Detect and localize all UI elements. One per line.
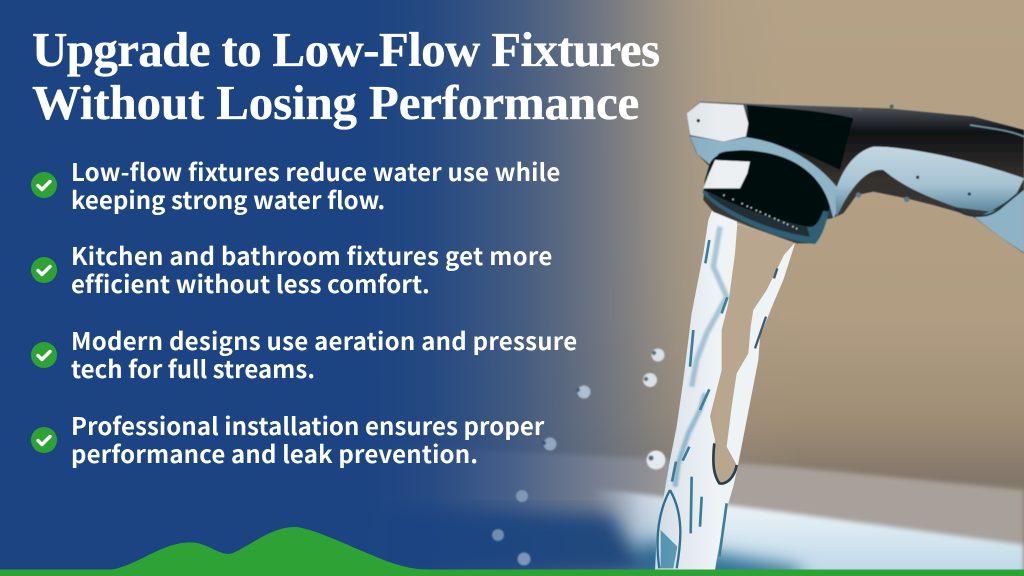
item 4 (31, 407, 544, 470)
text 1: Low-flow fixtures reduce water use while (71, 153, 560, 188)
text 1 (71, 153, 560, 216)
text 3: tech for full streams. (71, 350, 315, 385)
text 4 (71, 407, 544, 470)
stream body (655, 198, 795, 570)
item 2 (31, 237, 553, 300)
text 3 (71, 322, 577, 385)
icon: check 3 (31, 342, 57, 368)
icon: check 2 (31, 257, 57, 283)
item 1 (31, 153, 560, 216)
icon: check 4 (31, 427, 57, 453)
text 4: performance and leak prevention. (71, 435, 478, 470)
text 2 (71, 237, 553, 300)
green footer hills (0, 527, 1024, 576)
icon: check 1 (31, 172, 57, 198)
text 3: Modern designs use aeration and pressure (71, 322, 577, 357)
soft water texture (675, 227, 727, 487)
checklist (31, 153, 577, 470)
water stream (655, 198, 795, 570)
water droplets (492, 348, 666, 566)
text 2: efficient without less comfort. (71, 265, 430, 300)
faucet (687, 102, 1024, 253)
title: Upgrade to Low-Flow Fixtures (32, 22, 659, 77)
item 3 (31, 322, 577, 385)
text 1: keeping strong water flow. (71, 181, 385, 216)
title (32, 22, 660, 130)
counter and sink (432, 454, 1024, 570)
text 2: Kitchen and bathroom fixtures get more (71, 237, 553, 272)
text 4: Professional installation ensures proper (71, 407, 544, 442)
sharp water texture (657, 240, 777, 568)
title: Without Losing Performance (32, 75, 639, 130)
